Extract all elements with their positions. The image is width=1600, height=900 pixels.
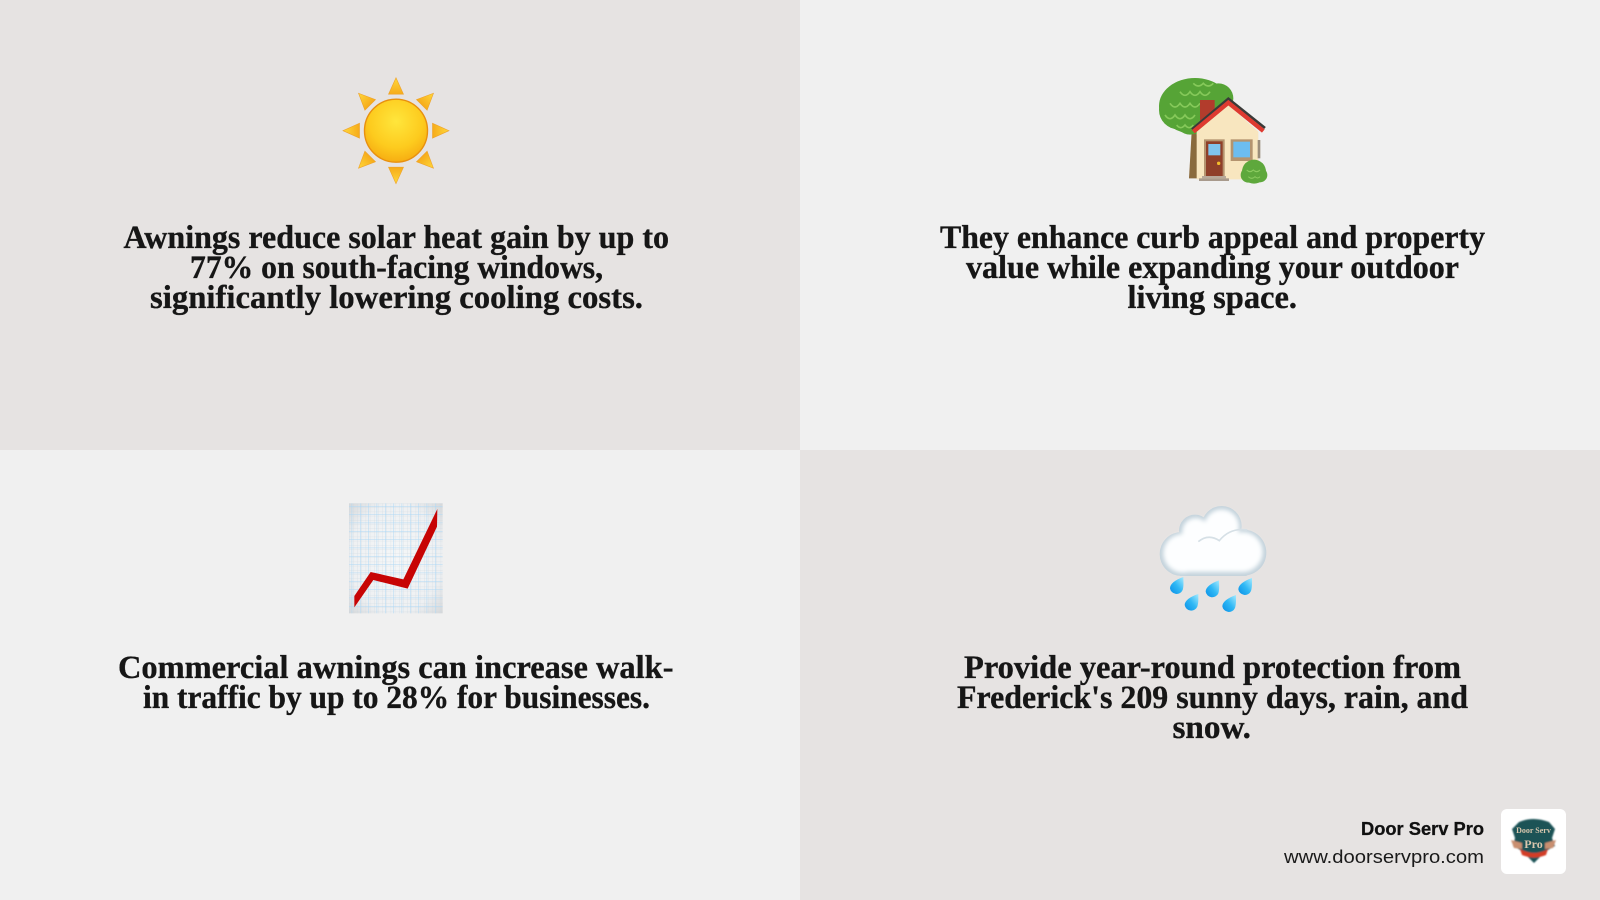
heading: solar heat text — [124, 220, 669, 316]
heading: walk-in traffic text: Commercial awnings can increase walk- — [118, 650, 674, 686]
icon: rising chart — [349, 503, 443, 614]
heading: curb appeal text — [940, 220, 1485, 316]
heading: curb appeal text: They enhance curb appeal and property — [940, 220, 1485, 256]
heading: weather protection text: snow. — [1172, 710, 1251, 746]
icon: rain cloud — [1160, 506, 1266, 612]
heading: curb appeal text: value while expanding your outdoor — [966, 250, 1459, 286]
panel: curb appeal — [800, 0, 1600, 450]
heading: solar heat text: 77% on south-facing windows, — [190, 250, 603, 286]
panel: walk-in traffic — [0, 450, 800, 900]
logo: Door Serv — [1516, 826, 1551, 835]
logo: Pro — [1524, 837, 1543, 851]
icon: sun — [343, 78, 449, 184]
brand url: www.doorservpro.com — [1283, 847, 1484, 867]
heading: weather protection text: Provide year-round protection from — [964, 650, 1461, 686]
heading: walk-in traffic text — [118, 650, 674, 716]
panel: weather protection — [800, 450, 1600, 900]
heading: curb appeal text: living space. — [1128, 280, 1297, 316]
heading: weather protection text — [957, 650, 1468, 746]
icon: house with tree — [1159, 78, 1268, 184]
heading: solar heat text: significantly lowering cooling costs. — [150, 280, 643, 316]
icon: rain drops — [1170, 577, 1252, 612]
panel: solar heat — [0, 0, 800, 450]
logo — [1501, 809, 1566, 874]
heading: solar heat text: Awnings reduce solar heat gain by up to — [124, 220, 669, 256]
brand name: Door Serv Pro — [1361, 819, 1484, 839]
heading: weather protection text: Frederick's 209 sunny days, rain, and — [957, 680, 1468, 716]
heading: walk-in traffic text: in traffic by up to 28% for businesses. — [143, 680, 650, 716]
